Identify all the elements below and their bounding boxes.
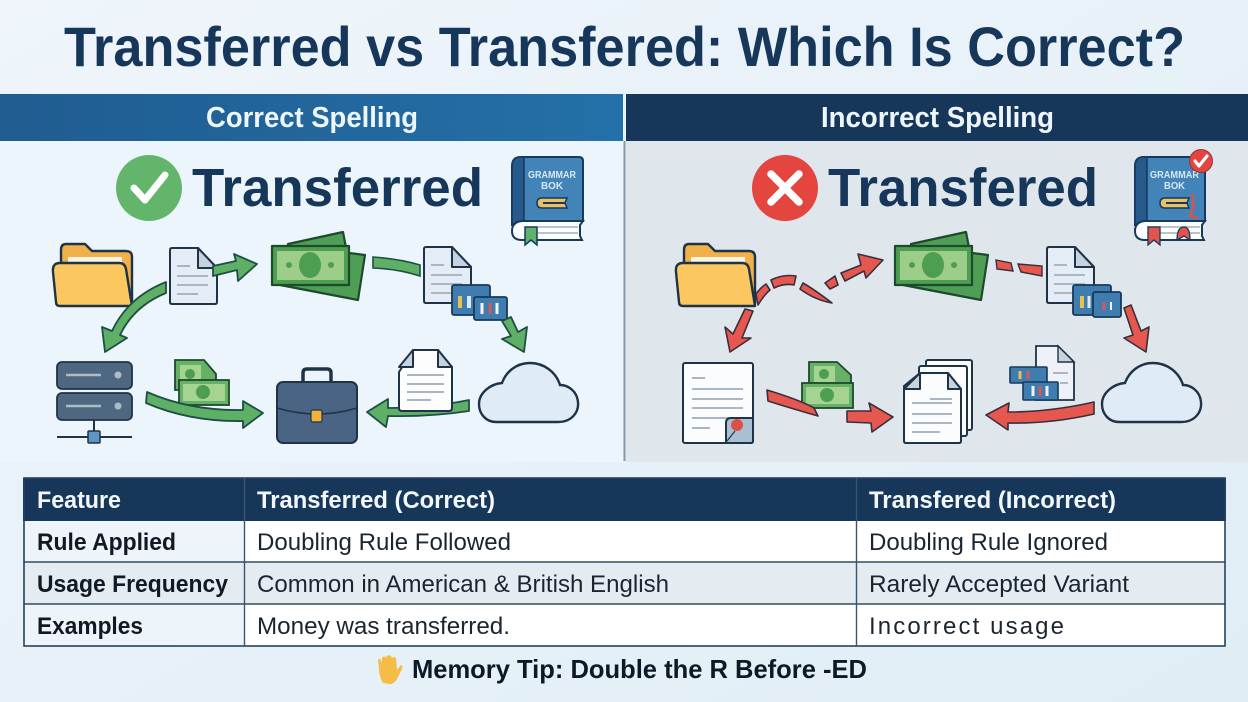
icon: small money (175, 360, 229, 405)
icon: document with seal (683, 363, 753, 443)
title: Transferred vs Transfered: Which Is Correct? (64, 15, 1185, 78)
header: incorrect spelling (626, 94, 1248, 141)
arrow: cloud to briefcase (367, 399, 469, 427)
arrow: broken arrow to stack (767, 390, 893, 432)
icon: white document (399, 350, 452, 411)
arrow: cloud to stack (986, 402, 1094, 430)
panel: correct spelling (0, 94, 623, 462)
header: correct spelling (0, 94, 623, 141)
icon: briefcase (277, 369, 357, 443)
arrow: document to server (102, 282, 166, 352)
icon: small money (802, 362, 853, 408)
icon: folder (676, 244, 755, 306)
arrow: broken arrow to money (825, 254, 883, 289)
icon: green check (116, 155, 182, 221)
icon: grammar book (512, 157, 583, 245)
arrow: dashed money to document (996, 260, 1042, 276)
row: usage frequency: Common in American & British English (257, 571, 669, 598)
icon: server (57, 362, 132, 443)
header: incorrect spelling: Incorrect Spelling (821, 102, 1054, 134)
icon: document (170, 248, 217, 304)
row: examples (37, 613, 1064, 640)
icon: folder (53, 244, 132, 306)
arrow: cards to cloud (502, 317, 527, 352)
icon: grammar book: BOK (541, 181, 564, 192)
row: rule applied: Doubling Rule Followed (257, 529, 511, 556)
row: rule applied: Doubling Rule Ignored (869, 529, 1108, 556)
icon: money (272, 232, 365, 300)
panel: incorrect spelling (626, 94, 1248, 462)
table header row: Transferred (Correct) (257, 487, 495, 514)
icon: grammar book with badge: BOK (1164, 181, 1186, 192)
row: usage frequency: Rarely Accepted Variant (869, 571, 1129, 598)
arrow: broken arrow to document (725, 309, 753, 352)
row: usage frequency (37, 571, 1129, 598)
icon: money (895, 232, 988, 300)
icon: grammar book with badge: GRAMMAR (1150, 170, 1200, 181)
divider (624, 141, 626, 461)
memory tip (378, 654, 867, 684)
icon: raised hand (378, 655, 402, 684)
icon: document with cards (424, 247, 507, 320)
row: rule applied: Rule Applied (37, 529, 176, 556)
row: rule applied (37, 529, 1108, 556)
icon: grammar book with badge (1135, 150, 1212, 245)
word: Transferred: Transferred (192, 158, 483, 218)
arrow: broken arc from folder (756, 276, 832, 305)
tip text: Memory Tip: Double the R Before -ED (412, 654, 867, 684)
row: examples: Money was transferred. (257, 613, 510, 640)
icon: red cross (752, 155, 818, 221)
icon: cloud (1102, 363, 1201, 422)
table header row: Transfered (Incorrect) (869, 487, 1116, 514)
row: examples: Incorrect usage (869, 613, 1064, 640)
comparison table (23, 478, 1226, 646)
icon: document with small cards (1010, 346, 1074, 400)
arrow: document to money (213, 254, 257, 281)
arrow: cards to cloud (1124, 305, 1149, 352)
arrow: server to briefcase (146, 392, 263, 428)
header: correct spelling: Correct Spelling (206, 102, 418, 134)
icon: document with cards (1047, 247, 1121, 317)
icon: grammar book: GRAMMAR (528, 170, 577, 181)
row: examples: Examples (37, 613, 143, 640)
icon: document stack (904, 360, 972, 443)
arrow: money to document (373, 257, 420, 276)
row: usage frequency: Usage Frequency (37, 571, 229, 598)
table header row: Feature (37, 487, 121, 514)
icon: cloud (479, 363, 578, 422)
table header row (37, 487, 1116, 514)
word: Transfered: Transfered (828, 158, 1098, 218)
